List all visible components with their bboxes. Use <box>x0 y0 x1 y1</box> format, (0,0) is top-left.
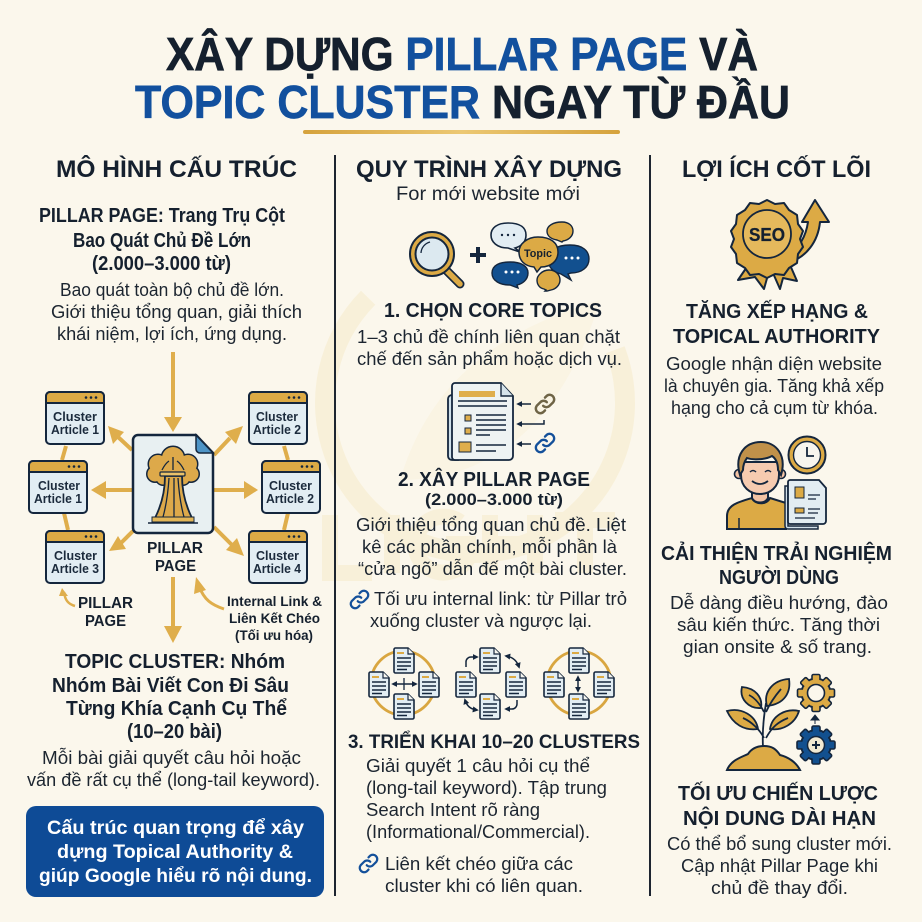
text: pillar description: Giới thiệu tổng quan, giải thích <box>51 302 302 322</box>
callout: dựng Topical Authority & <box>57 842 293 863</box>
benefit 2: sâu kiến thức. Tăng thời <box>677 615 880 635</box>
tip: internal link <box>351 589 627 631</box>
step 3: 3. TRIỂN KHAI 10–20 CLUSTERS <box>348 730 640 753</box>
title: XÂY DỰNG PILLAR PAGE VÀ <box>166 28 758 80</box>
label: internal link: (Tối ưu hóa) <box>235 628 313 643</box>
step 3: (Informational/Commercial). <box>366 822 590 842</box>
benefit 1 <box>664 300 884 418</box>
icon: user, clock and document <box>727 436 826 529</box>
cluster cards: Article 4 <box>253 562 301 576</box>
tip: cross links: Liên kết chéo giữa các <box>385 854 573 874</box>
step 1: chế đến sản phẩm hoặc dịch vụ. <box>357 349 622 369</box>
panel: lợi ích cốt lõi <box>661 155 892 898</box>
arrows <box>62 352 288 643</box>
label: pillar page lower <box>59 588 133 630</box>
step 1: 1–3 chủ đề chính liên quan chặt <box>357 327 620 347</box>
cluster cards: Article 2 <box>253 423 301 437</box>
step 3: (long-tail keyword). Tập trung <box>366 778 607 798</box>
tip: internal link: Tối ưu internal link: từ Pillar trỏ <box>374 589 627 609</box>
benefit 1: hạng cho cả cụm từ khóa. <box>671 398 878 418</box>
step 1 <box>357 300 622 369</box>
cluster cards: Article 1 <box>51 423 99 437</box>
tip: internal link: xuống cluster và ngược lại. <box>370 611 592 631</box>
tip: cross links: cluster khi có liên quan. <box>385 876 583 896</box>
text: pillar description <box>51 280 302 344</box>
label: internal link: Internal Link & <box>227 594 322 609</box>
panel: quy trình xây dựng <box>348 155 640 896</box>
cluster cards: Article 2 <box>266 492 314 506</box>
diagram: pillar and clusters <box>29 352 322 643</box>
title <box>135 28 790 128</box>
benefit 2: gian onsite & số trang. <box>683 637 872 657</box>
callout: giúp Google hiểu rõ nội dung. <box>39 866 312 887</box>
step 2: kê các phần chính, mỗi phần là <box>362 536 618 557</box>
step 1: 1. CHỌN CORE TOPICS <box>384 300 602 322</box>
label: internal link <box>194 577 322 643</box>
step 3: Giải quyết 1 câu hỏi cụ thể <box>366 756 590 776</box>
icon: pillar page with links <box>448 383 554 460</box>
benefit 2: NGƯỜI DÙNG <box>719 565 839 589</box>
cluster cards: Cluster <box>269 479 312 493</box>
benefit 3: Cập nhật Pillar Page khi <box>681 856 878 876</box>
heading: quy trình xây dựng: QUY TRÌNH XÂY DỰNG <box>356 155 622 183</box>
panel: mô hình cấu trúc <box>26 155 324 897</box>
heading: mô hình cấu trúc: MÔ HÌNH CẤU TRÚC <box>56 155 297 183</box>
cluster cards: Article 3 <box>51 562 99 576</box>
subheading: For mới website mới <box>396 184 580 205</box>
cluster cards: Cluster <box>256 549 299 563</box>
step 2: 2. XÂY PILLAR PAGE <box>398 467 590 491</box>
heading: topic cluster: Nhóm Bài Viết Con Đi Sâu <box>52 675 289 697</box>
label: pillar page lower: PILLAR <box>78 595 133 612</box>
cluster cards: Article 1 <box>34 492 82 506</box>
step 3 <box>348 730 640 842</box>
benefit 3: chủ đề thay đổi. <box>711 878 848 898</box>
heading: pillar page: Bao Quát Chủ Đề Lớn <box>73 230 251 252</box>
title: TOPIC CLUSTER NGAY TỪ ĐẦU <box>135 76 790 128</box>
benefit 1: TOPICAL AUTHORITY <box>673 326 881 348</box>
callout <box>26 806 324 897</box>
label: pillar page: PILLAR <box>147 540 203 557</box>
heading: pillar page: (2.000–3.000 từ) <box>92 253 231 275</box>
heading: lợi ích cốt lõi: LỢI ÍCH CỐT LÕI <box>682 155 871 183</box>
text: cluster description <box>27 747 320 790</box>
label: internal link: Liên Kết Chéo <box>229 611 320 626</box>
step 2: Giới thiệu tổng quan chủ đề. Liệt <box>356 515 626 535</box>
heading: topic cluster: (10–20 bài) <box>127 721 222 743</box>
icon: magnifier plus topic bubbles: Topic <box>524 248 552 260</box>
tip: cross links <box>360 854 583 896</box>
cluster cards: Cluster <box>54 549 97 563</box>
text: pillar description: khái niệm, lợi ích, ứng dụng. <box>57 324 287 344</box>
benefit 3: NỘI DUNG DÀI HẠN <box>683 806 876 830</box>
step 2: “cửa ngõ” dẫn đế một bài cluster. <box>358 558 627 579</box>
step 3: Search Intent rõ ràng <box>366 800 540 820</box>
heading: pillar page <box>39 205 285 275</box>
cluster cards: Cluster <box>38 479 80 493</box>
icon: magnifier plus topic bubbles <box>410 222 589 291</box>
benefit 1: TĂNG XẾP HẠNG & <box>686 300 868 323</box>
icon: pillar page document <box>133 435 213 533</box>
label: pillar page <box>147 540 203 575</box>
cluster cards: Cluster <box>256 410 298 424</box>
heading: pillar page: PILLAR PAGE: Trang Trụ Cột <box>39 205 285 227</box>
cluster cards: Cluster <box>53 410 97 424</box>
icon: seo badge: SEO <box>749 225 785 245</box>
text: pillar description: Bao quát toàn bộ chủ đề lớn. <box>60 280 284 300</box>
callout: Cấu trúc quan trọng để xây <box>47 818 304 839</box>
step 2 <box>356 467 627 579</box>
heading: topic cluster: Từng Khía Cạnh Cụ Thể <box>66 698 287 720</box>
heading: topic cluster <box>52 651 289 743</box>
heading: topic cluster: TOPIC CLUSTER: Nhóm <box>65 651 285 673</box>
step 2: (2.000–3.000 từ) <box>425 491 563 509</box>
benefit 1: Google nhận diện website <box>666 354 882 374</box>
cluster cards <box>29 392 320 583</box>
benefit 2: CẢI THIỆN TRẢI NGHIỆM <box>661 541 892 565</box>
benefit 2 <box>661 541 892 657</box>
label: pillar page: PAGE <box>155 558 196 575</box>
label: pillar page lower: PAGE <box>85 613 126 630</box>
benefit 3: TỐI ƯU CHIẾN LƯỢC <box>678 781 878 805</box>
benefit 3: Có thể bổ sung cluster mới. <box>667 834 892 854</box>
icon: plant and gears <box>727 674 835 770</box>
benefit 2: Dễ dàng điều hướng, đào <box>670 592 888 613</box>
icon: three cluster groups <box>369 648 614 719</box>
text: cluster description: vấn đề rất cụ thể (long-tail keyword). <box>27 770 320 790</box>
icon: seo badge <box>731 200 829 289</box>
benefit 3 <box>667 781 892 898</box>
text: cluster description: Mỗi bài giải quyết câu hỏi hoặc <box>42 747 301 768</box>
benefit 1: là chuyên gia. Tăng khả xếp <box>664 376 884 396</box>
